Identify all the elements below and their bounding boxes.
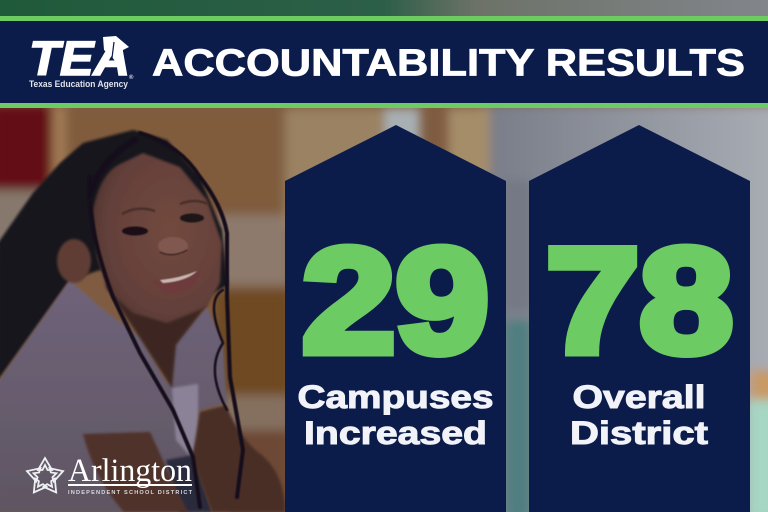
facial features: [122, 201, 208, 294]
braids: [89, 133, 243, 507]
Arlington ISD logo: [25, 453, 193, 496]
panel: overall district: [529, 125, 750, 512]
title: ACCOUNTABILITY RESULTS: [152, 42, 745, 84]
number 29: 29: [302, 217, 489, 384]
TEA logo: TEA: [29, 33, 130, 86]
hair behind: [0, 130, 228, 380]
Arlington ISD logo: Arlington: [68, 453, 192, 489]
label: Campuses: [298, 379, 494, 415]
TEA logo: Texas Education Agency: [29, 79, 129, 89]
TEA logo: ®: [129, 74, 134, 81]
number 78: 78: [546, 217, 733, 384]
neck: [105, 285, 207, 388]
label: Overall: [572, 379, 706, 415]
girl photo subject: [0, 130, 285, 512]
label: [298, 379, 494, 451]
label: Increased: [304, 415, 487, 451]
shorts: [166, 455, 212, 512]
label: [570, 379, 708, 451]
panel: campuses increased: [285, 125, 506, 512]
icon: star: [25, 458, 65, 496]
Arlington ISD logo: INDEPENDENT SCHOOL DISTRICT: [68, 490, 193, 496]
header band: [0, 16, 768, 108]
label: District: [570, 415, 708, 451]
shirt: [0, 280, 227, 512]
arms: [83, 405, 285, 512]
face: [57, 153, 222, 323]
